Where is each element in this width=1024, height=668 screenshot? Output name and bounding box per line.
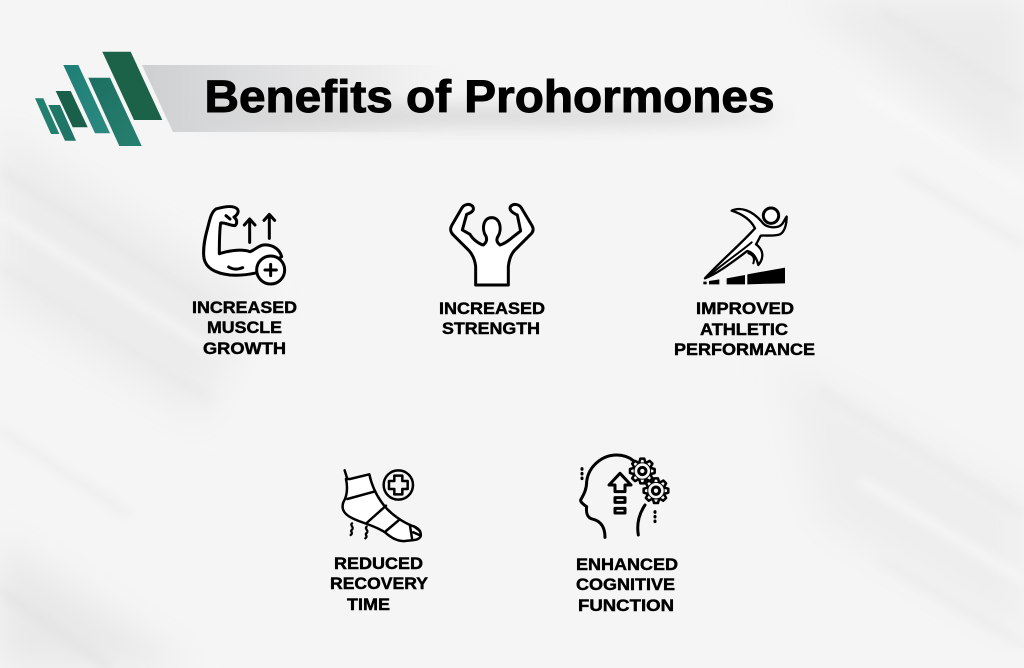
label — [330, 555, 428, 614]
benefit: increased strength — [439, 204, 545, 338]
icon: flexed arm with arrows — [204, 206, 285, 284]
icon: sprinter on rising steps — [703, 208, 787, 284]
label — [192, 299, 297, 358]
benefit: improved athletic performance — [674, 208, 815, 359]
label: INCREASED — [192, 299, 297, 317]
label: MUSCLE — [207, 319, 282, 337]
benefit: reduced recovery time — [330, 470, 428, 614]
label: REDUCED — [334, 555, 423, 573]
icon: head with gears and up arrow — [581, 455, 668, 537]
label: TIME — [347, 596, 390, 614]
gear lower — [644, 478, 668, 503]
label — [576, 556, 678, 615]
label: ATHLETIC — [700, 321, 788, 339]
benefit: enhanced cognitive function — [576, 455, 678, 615]
title: Benefits of Prohormones — [204, 71, 774, 122]
label — [674, 300, 815, 359]
logo: teal bars — [35, 52, 162, 146]
label — [439, 300, 545, 338]
label: GROWTH — [203, 340, 286, 358]
icon: bandaged foot with medical cross — [343, 470, 421, 541]
label: RECOVERY — [330, 575, 428, 593]
label: COGNITIVE — [576, 576, 675, 594]
label: FUNCTION — [578, 597, 674, 615]
gear upper — [630, 459, 655, 483]
title band — [142, 65, 780, 132]
label: ENHANCED — [576, 556, 678, 574]
label: INCREASED — [439, 300, 545, 318]
icon: flexing torso — [451, 204, 533, 285]
label: IMPROVED — [696, 300, 794, 318]
label: PERFORMANCE — [674, 341, 815, 359]
benefit: increased muscle growth — [192, 206, 297, 358]
label: STRENGTH — [442, 320, 540, 338]
